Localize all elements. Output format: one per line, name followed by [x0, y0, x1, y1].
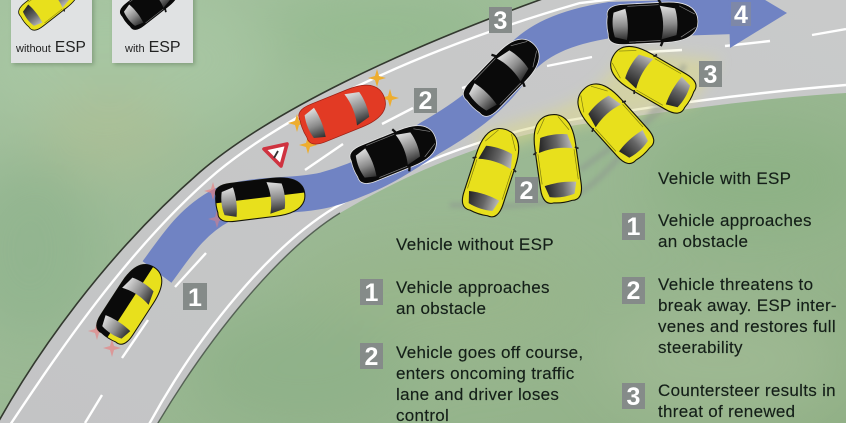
item 2: Vehicle goes off course, [396, 343, 583, 362]
road edge line: inner [147, 85, 846, 423]
item 2: enters oncoming traffic [396, 364, 575, 383]
item 1: 1 [365, 279, 379, 307]
item 2: 2 [627, 277, 640, 305]
step marker 1 on road: 1 [188, 284, 202, 312]
step marker 3 on road: 3 [494, 7, 507, 35]
text block: vehicle with ESP [622, 169, 837, 421]
item 2 [622, 275, 837, 357]
step marker 4 on arrow [731, 1, 751, 29]
item 2: Vehicle threatens to [658, 275, 813, 294]
item 2: 2 [365, 343, 378, 371]
item 1: Vehicle approaches [396, 278, 550, 297]
step marker 2 without ESP [515, 177, 538, 205]
item 1: Vehicle approaches [658, 211, 812, 230]
car: red obstacle car [295, 78, 392, 148]
step marker 4 on arrow: 4 [734, 1, 748, 29]
step marker 2 without ESP: 2 [520, 177, 533, 205]
car: yellow off course A [457, 123, 527, 221]
text block: vehicle with ESP: Vehicle with ESP [658, 169, 791, 188]
text block: vehicle without ESP [360, 235, 583, 423]
legend: without ESP [11, 0, 94, 65]
yield sign [264, 144, 287, 166]
car: black with ESP 4 [606, 0, 699, 49]
road edge line: outer [0, 0, 640, 423]
item 1 [622, 211, 812, 251]
item 1 [360, 278, 550, 318]
car: split car (obstacle) [214, 175, 307, 223]
item 1: 1 [627, 213, 641, 241]
item 3: Countersteer results in [658, 381, 836, 400]
car: black with ESP 3 [456, 28, 550, 123]
item 2: lane and driver loses [396, 385, 559, 404]
item 2: break away. ESP inter- [658, 296, 837, 315]
step marker 3 with ESP [699, 61, 722, 89]
text block: vehicle without ESP: Vehicle without ESP [396, 235, 554, 254]
driving path: blue band and arrow [157, 0, 787, 272]
item 1: an obstacle [396, 299, 486, 318]
car: yellow off course C [567, 74, 660, 170]
legend: without ESP: without ESP [15, 39, 86, 56]
car: yellow off course B [528, 112, 586, 206]
item 3 [622, 381, 836, 421]
item 2: venes and restores full [658, 317, 836, 336]
step marker 1 on road [183, 283, 207, 312]
skid marks and yellow glow of the vehicle without ESP [450, 50, 720, 206]
item 3: threat of renewed [658, 402, 795, 421]
item 2 [360, 343, 583, 423]
car: yellow off course D [602, 36, 701, 120]
step marker 3 on road [489, 7, 512, 35]
legend: with ESP [112, 0, 195, 65]
step marker 2 on road: 2 [419, 87, 432, 115]
car: split car approaching (1) [92, 257, 170, 348]
legend: with ESP: withESP [124, 39, 181, 56]
item 2: steerability [658, 338, 743, 357]
step marker 3 with ESP: 3 [704, 61, 717, 89]
step marker 2 on road [414, 87, 437, 115]
item 1: an obstacle [658, 232, 748, 251]
item 3: 3 [627, 383, 640, 411]
hazard flashes [88, 69, 399, 357]
car: black with ESP 2 [345, 115, 443, 190]
